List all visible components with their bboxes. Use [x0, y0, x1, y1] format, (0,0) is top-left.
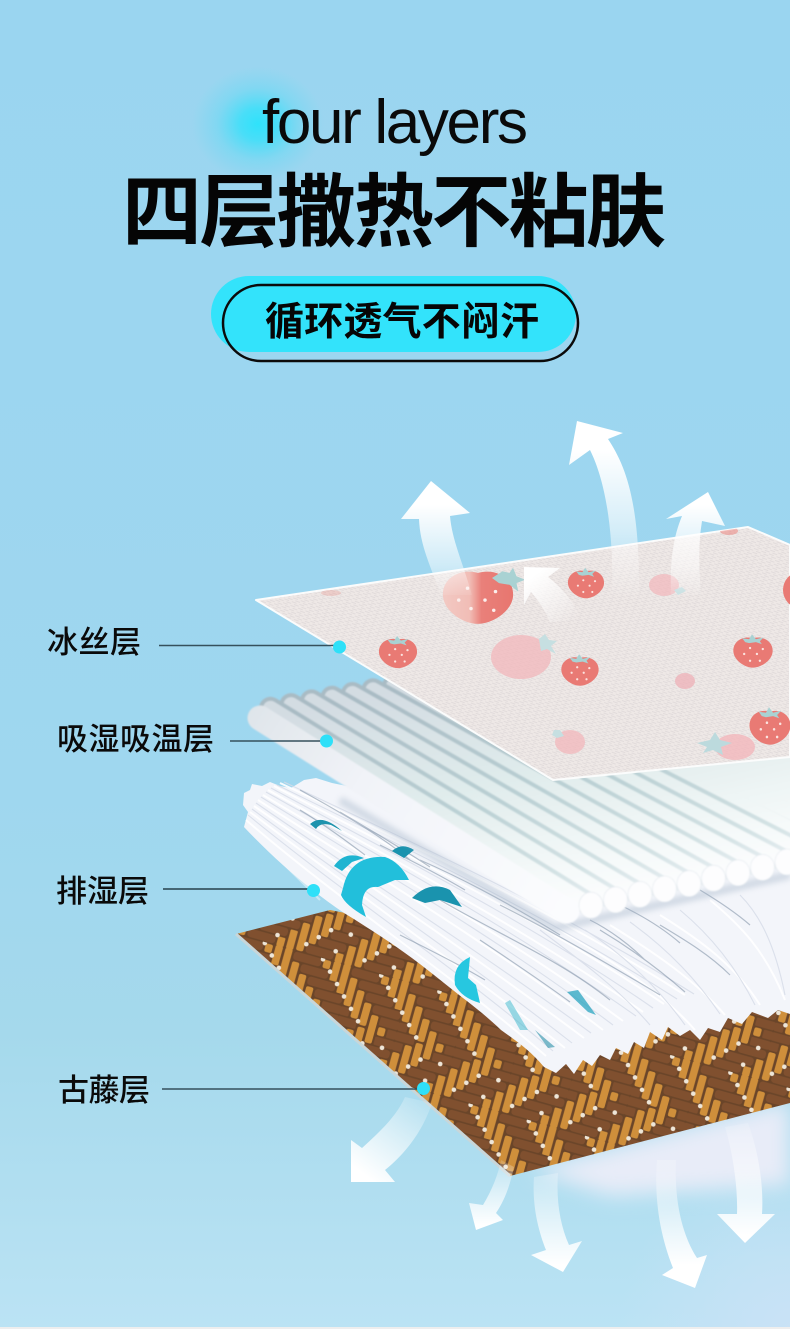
- arrow up: centre large: [569, 421, 639, 595]
- arrow up: small on sheet: [524, 567, 582, 622]
- label: rattan layer: 古藤层: [58, 1073, 150, 1108]
- subtitle pill: [211, 276, 578, 361]
- arrow down: 4: [656, 1160, 707, 1288]
- strand lines: [246, 783, 785, 1056]
- label: ice silk layer: [47, 625, 346, 660]
- arrow down: 5: [717, 1123, 775, 1243]
- layer 3: white moisture-wicking strands: [243, 778, 790, 1074]
- label: absorbent layer: 吸湿吸温层: [57, 722, 214, 757]
- arrow down: 1: [351, 1097, 432, 1182]
- layer 1: ice silk sheet: [256, 527, 790, 780]
- label: wicking layer: [56, 874, 320, 909]
- title glow: [192, 66, 324, 182]
- subtitle text: 循环透气不闷汗: [265, 291, 539, 347]
- title: english: four layers: [262, 88, 528, 157]
- arrow down: 2: [469, 1160, 514, 1230]
- rattan underside haze: [530, 1100, 790, 1196]
- arrow up: left: [401, 481, 472, 595]
- arrow up: right: [666, 492, 725, 595]
- strawberries: [321, 527, 790, 760]
- label: ice silk layer: 冰丝层: [47, 625, 141, 660]
- title: chinese heading: 四层撒热不粘肤: [122, 148, 666, 264]
- arrow down: 3: [531, 1173, 582, 1272]
- label: absorbent layer: [57, 722, 333, 757]
- blue print marks: [310, 820, 596, 1048]
- tube shadow: [340, 800, 790, 928]
- label: rattan layer: [58, 1073, 430, 1108]
- layer 4: rattan weave: [236, 910, 790, 1176]
- label: wicking layer: 排湿层: [56, 874, 149, 909]
- layer 2: absorbent tubes: [260, 653, 790, 918]
